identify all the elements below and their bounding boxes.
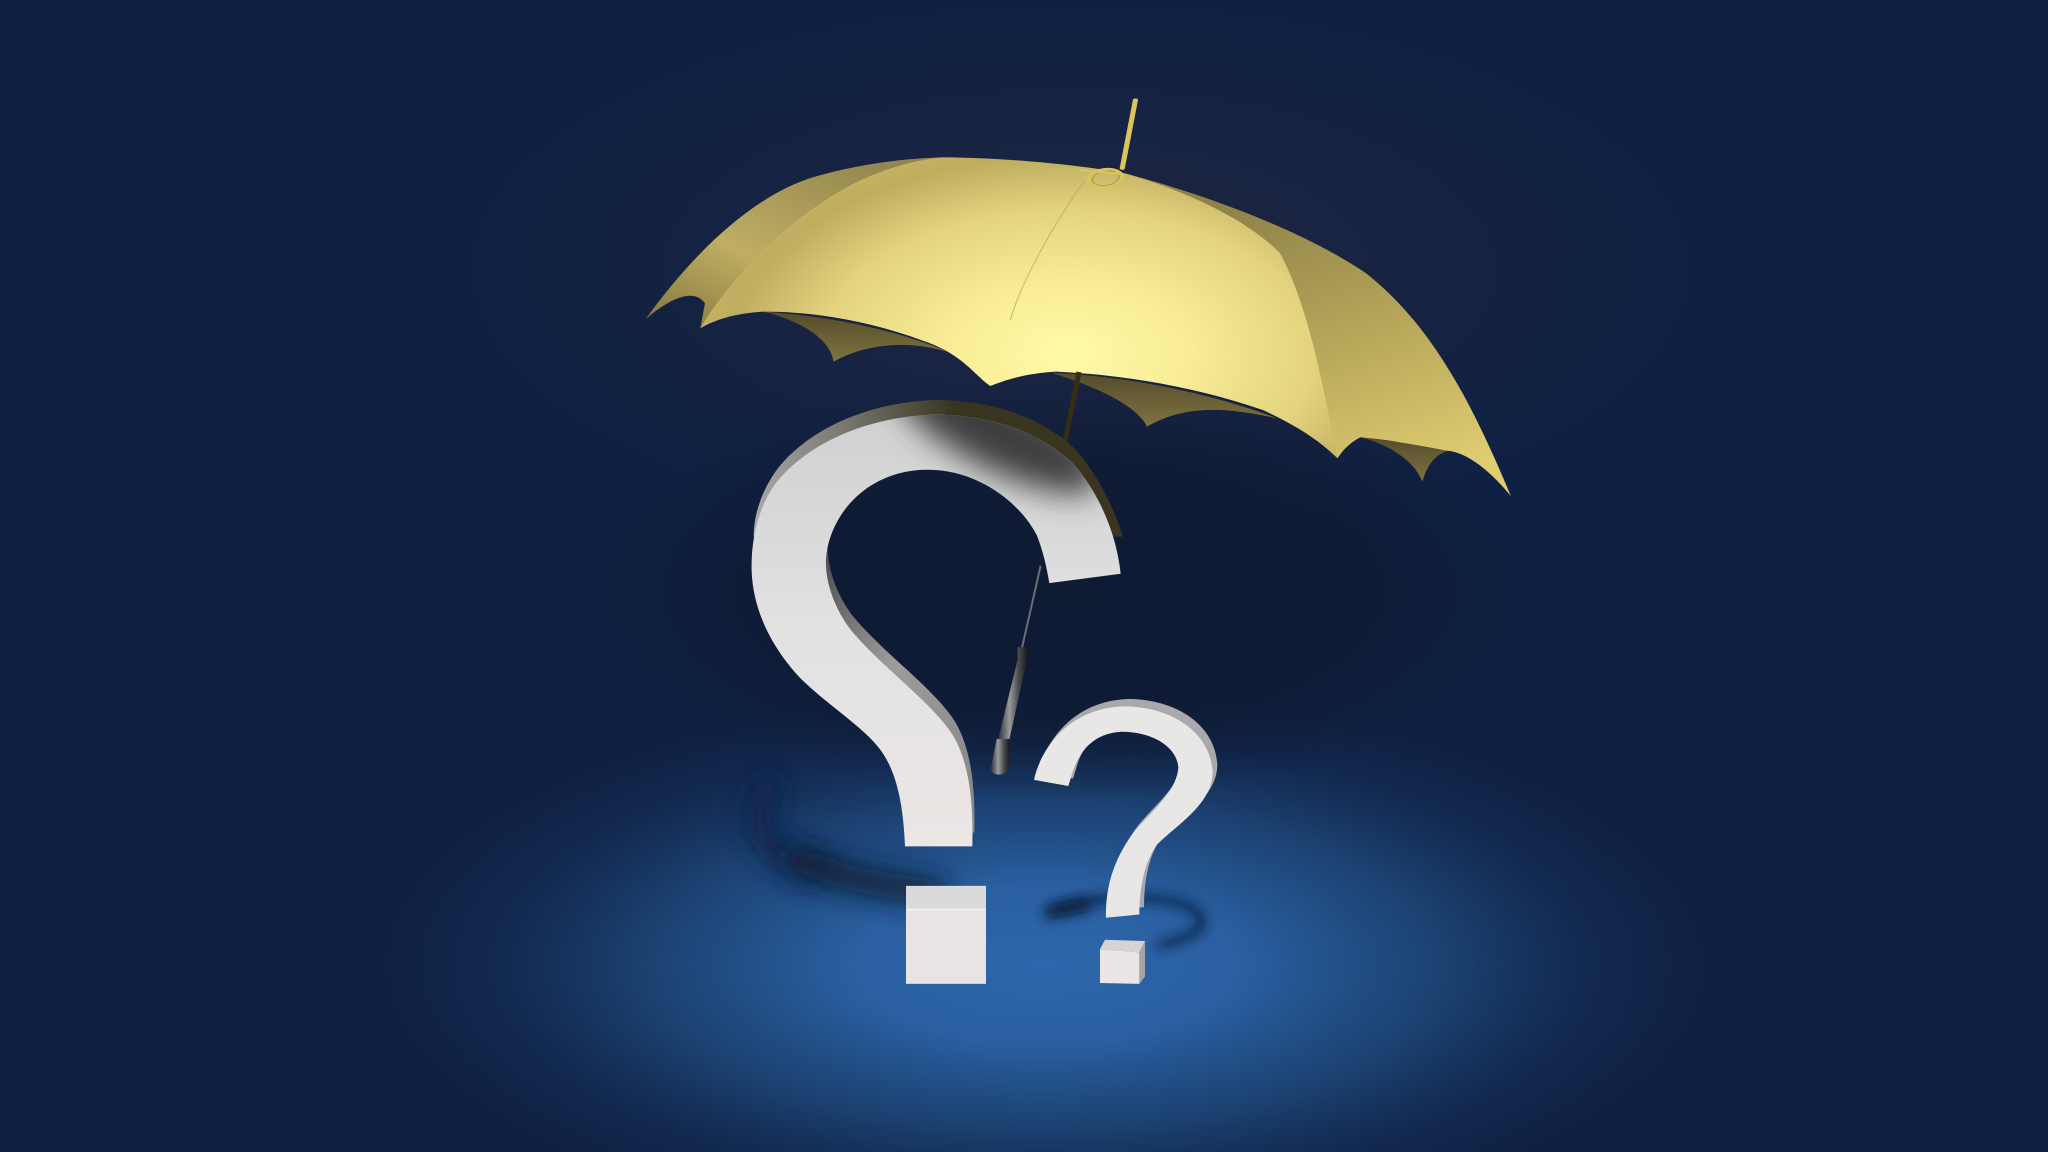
- face: [752, 415, 1121, 846]
- umbrella seam: [1010, 180, 1085, 320]
- umbrella underside: right: [1360, 437, 1449, 482]
- dot: [906, 886, 986, 984]
- umbrella shaft: [1065, 372, 1079, 442]
- extrusion, top: [754, 400, 1123, 537]
- background: halo behind umbrella: [460, 0, 1700, 540]
- dot: [1100, 940, 1145, 984]
- extrusion: [1039, 699, 1217, 910]
- umbrella back panel: right: [1125, 173, 1511, 496]
- floor shadow: large question mark: [759, 790, 935, 892]
- umbrella underside: centre: [1050, 373, 1277, 427]
- umbrella shadow in background: [580, 380, 1540, 800]
- umbrella: [646, 100, 1511, 496]
- large question mark: [752, 345, 1123, 984]
- umbrella tip: [1122, 100, 1135, 168]
- floor shadow: small question mark: [1050, 898, 1202, 945]
- large and small question marks with handle: [752, 345, 1217, 984]
- small question mark: [1034, 699, 1217, 984]
- umbrella back panel: left: [646, 157, 941, 328]
- face: [1034, 706, 1213, 918]
- umbrella front panel: [700, 157, 1338, 458]
- extrusion, lower curve: [802, 546, 974, 832]
- floor glow: [385, 695, 1705, 1152]
- illustration: umbrella sheltering two question marks: [468, 98, 1622, 1152]
- shading from umbrella: [888, 414, 1102, 520]
- umbrella handle: [991, 566, 1041, 775]
- umbrella underside: left: [764, 312, 947, 362]
- umbrella strap loop: [1080, 165, 1128, 191]
